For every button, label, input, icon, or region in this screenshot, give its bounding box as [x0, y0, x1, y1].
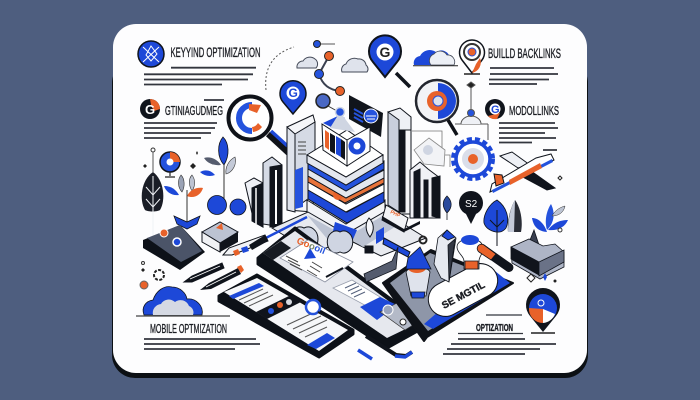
icon: blue balls — [174, 196, 246, 229]
icon: sparkles — [143, 148, 198, 172]
small tools — [364, 236, 426, 282]
icon: dome connector — [455, 82, 488, 140]
icon: triangle plate — [414, 138, 445, 166]
center stacked tower — [307, 130, 385, 234]
black screen panel — [349, 95, 383, 137]
block: build backlinks — [460, 40, 561, 84]
right face — [347, 127, 370, 166]
search pill: SE MGTIL — [440, 280, 487, 312]
text lines — [499, 123, 558, 150]
label block PHP: PHP — [389, 209, 402, 219]
divider — [136, 315, 230, 317]
card with Google word — [280, 236, 353, 282]
block: second heading — [140, 99, 224, 138]
block: keyword optimization — [138, 41, 260, 84]
icon: target pin — [460, 40, 484, 74]
layer: white book — [308, 182, 384, 212]
left mini globe — [160, 152, 180, 177]
heading: keyword optimization: KEYYIND OPTIMIZATION — [170, 44, 260, 60]
crystal center — [434, 230, 456, 282]
heading: mobile optimization: MOBILE OPTMIZATION — [150, 322, 227, 336]
icon: blue cloud — [413, 50, 458, 66]
icon: dark leaf tree — [142, 172, 163, 240]
text lines — [443, 315, 556, 354]
pencil long blue — [223, 217, 307, 256]
icon: gear — [453, 139, 493, 179]
illustration: planter box — [202, 222, 238, 252]
short right building — [410, 162, 440, 218]
bottom right trees — [443, 191, 568, 279]
card with Google word: Goooil — [295, 236, 327, 257]
block: optimization — [443, 315, 556, 354]
block: modollinks — [485, 99, 559, 150]
icon: G badge: G — [145, 102, 155, 117]
blocks — [511, 230, 564, 279]
chart: left isometric buildings — [245, 115, 315, 227]
icon: magnifier left — [228, 96, 294, 158]
icon: small pin G — [280, 81, 306, 114]
lower card — [333, 280, 421, 330]
icon: small pin G: G — [288, 86, 298, 100]
layer: blue upper — [308, 161, 384, 191]
icon: thin outline panel — [412, 131, 450, 167]
building far left — [245, 178, 263, 227]
blue roof and connector — [323, 115, 345, 127]
layer: orange — [308, 176, 384, 203]
icon: small gear dots — [140, 262, 164, 289]
text lines — [144, 339, 260, 349]
label block PHP — [382, 205, 420, 232]
speech bubble S2: S2 — [465, 199, 478, 210]
layer: blue — [308, 188, 384, 223]
connector network — [266, 40, 344, 96]
bulb left — [406, 259, 430, 298]
seo platform — [383, 250, 513, 341]
icon: bottom pin — [526, 288, 560, 333]
black tree — [508, 200, 522, 232]
text lines — [144, 68, 256, 84]
bulb right — [457, 235, 483, 269]
building second — [263, 157, 282, 227]
plant — [532, 204, 568, 232]
heading: GTINIAGUDMEG — [165, 103, 223, 118]
icon: magnifier right — [416, 80, 458, 135]
icon: gray clouds — [297, 57, 368, 72]
icon: blue cloud large — [143, 287, 202, 315]
layer: base white — [307, 200, 385, 234]
heading: optimization: OPTIZATION — [476, 323, 513, 334]
pencil black — [184, 263, 224, 282]
icon: airplane — [490, 152, 555, 193]
icon: big pin G — [369, 35, 401, 77]
icon: network badge — [138, 41, 164, 67]
capsule — [477, 244, 513, 272]
text lines — [144, 100, 224, 138]
tall right building — [388, 108, 411, 214]
layer: grey book — [308, 168, 384, 198]
heading: build backlinks: BUILLD BACKLINKS — [488, 46, 561, 61]
icon: big pin G: G — [380, 44, 390, 60]
small leaf — [443, 196, 451, 220]
block: mobile optimization — [136, 287, 260, 349]
layer: top white — [307, 130, 383, 177]
illustration: left platform — [143, 225, 205, 270]
pencil orange tip — [200, 265, 244, 290]
icon: G badge right: G — [491, 104, 500, 116]
text lines — [489, 68, 558, 84]
stylus bottom — [358, 336, 412, 359]
phone lower — [219, 275, 353, 357]
center cube — [316, 94, 370, 166]
left face — [322, 124, 347, 166]
base plinth — [272, 212, 426, 256]
phone upper — [258, 228, 423, 348]
icon: sparkles right — [527, 176, 562, 282]
icon: plants — [164, 137, 236, 228]
tall building — [287, 115, 315, 212]
dark triangle gem — [406, 247, 431, 269]
bulbs and crystals — [406, 230, 513, 298]
chart: right isometric buildings — [388, 108, 440, 218]
icon: probe line — [396, 73, 410, 87]
panel: card — [112, 24, 588, 378]
blue tree — [484, 200, 508, 246]
heading: modollinks: MODOLLINKS — [509, 103, 559, 118]
